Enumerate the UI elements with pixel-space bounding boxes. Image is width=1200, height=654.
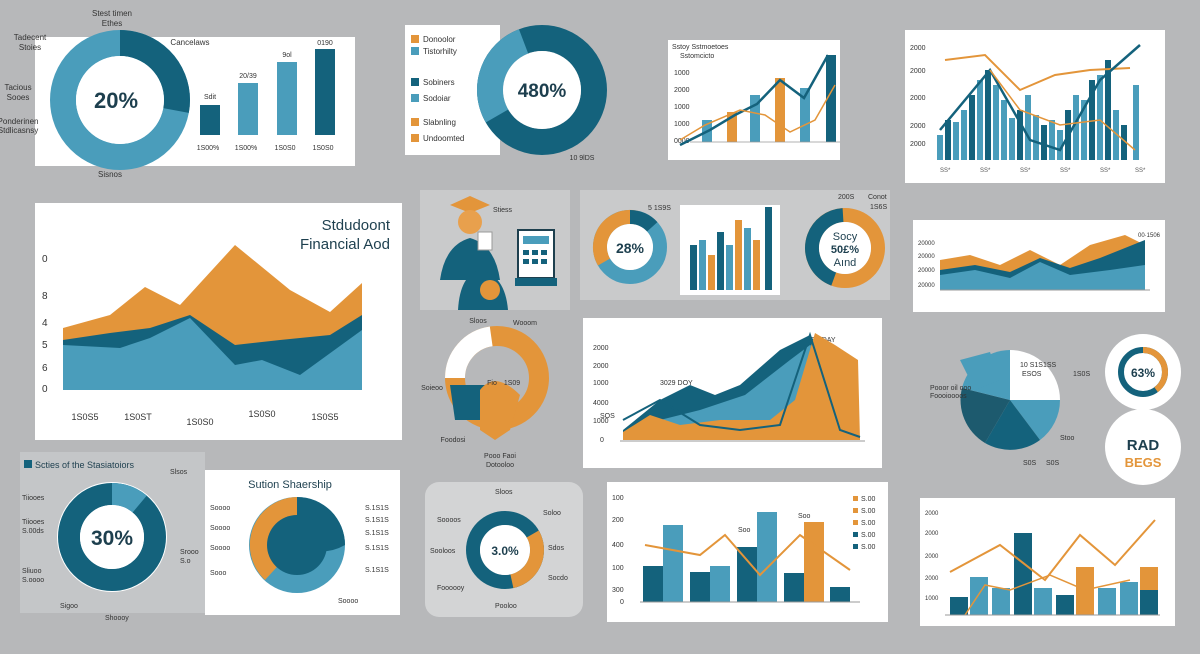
panel: bar + line chart top middle: 1000 [674,121,690,128]
panel: orange donut with figure: Wooom [513,320,537,327]
panel: Student Financial Aid area chart: 1S0S0 [186,417,214,427]
panel: orange donut with figure: Soieoo [421,385,443,392]
panel: 3.0% donut: Sooloos [430,548,456,555]
donut labels: Cancelaws [170,38,210,47]
icon: calculator [515,230,557,286]
panel: 3.0% donut: Soooos [437,517,461,524]
panel: 3.0% donut: Socdo [548,575,568,582]
legend: Slabnling [423,118,456,127]
bar chart: 1S00% [235,145,257,152]
panel: bottom-left 30% donut: Srooo [180,549,199,556]
panel: top-right bar chart with lines: SS* [1020,168,1031,174]
panel: orange donut with figure: Foodosi [441,437,466,444]
panel: bottom bar + line chart: S.00 [861,508,876,515]
panel: person illustration: Stiess [493,207,513,214]
panel: top-right bar chart with lines: SS* [980,168,991,174]
panel: orange donut with figure: 1S09 [504,380,520,387]
panel: Student Financial Aid area chart: 5 [42,340,48,351]
panel: Sution Shaership pie: S.1S1S [365,567,389,574]
panel: bottom-left 30% donut: S.00ds [22,528,44,535]
bar chart: 0190 [317,40,333,47]
panel: bar + line chart top middle: 0000 [674,138,690,145]
panel: bottom-right bar + line chart: 2000 [925,511,939,517]
panel: right area chart: 20000 [918,241,935,247]
panel: bottom-right bar + line chart [920,498,1175,626]
donut Socy 50%: 200S [838,194,855,201]
panel: bottom bar + line chart: S.00 [861,496,876,503]
panel: top-right bar chart with lines: 2000 [910,45,926,52]
panel: center area chart: 2000 [593,363,609,370]
panel: bottom bar + line chart: Soo [738,527,751,534]
panel: bottom bar + line chart: S.00 [861,520,876,527]
panel: pie chart right: Stoo [1060,435,1075,442]
panel: Student Financial Aid area chart: 1S0ST [124,412,152,422]
bar chart [197,40,335,152]
panel: bottom bar + line chart: 200 [612,517,624,524]
legend [411,35,464,143]
panel: Sution Shaership pie: Soooo [210,525,230,532]
panel: top-right bar chart with lines: SS* [940,168,951,174]
donut Socy 50%: 1S6S [870,204,887,211]
bar chart: 9ol [282,52,292,59]
panel: Student Financial Aid area chart: 1S0S5 [71,412,99,422]
panel: orange donut with figure: Sloos [469,318,487,325]
panel: orange donut with figure: Pooo Faoi [484,453,516,460]
panel: Sution Shaership pie: Soooo [338,598,358,605]
panel: bottom-left 30% donut: Sigoo [60,603,78,610]
panel: Sution Shaership pie: S.1S1S [365,545,389,552]
donut 480%: 480% [518,81,566,102]
panel: bar + line chart top middle: Sstomcicto [680,53,714,60]
panel: center area chart: SOS DAY [805,337,836,344]
panel: 3.0% donut: Pooloo [495,603,517,610]
panel: center area chart [583,318,882,468]
panel: Sution Shaership pie: S.1S1S [365,505,389,512]
bar chart [680,205,780,295]
donut 480% [471,19,613,162]
panel: pie chart right: ESOS [1022,371,1042,378]
panel: 3.0% donut: 3.0% [491,544,519,558]
panel: pie chart right: 10 S1S1SS [1020,362,1057,369]
panel: bottom-left 30% donut: Sliuoo [22,568,42,575]
donut labels: Stest timen [92,9,132,18]
panel: top-right bar chart with lines [905,30,1165,183]
legend: Sodoiar [423,94,451,103]
panel: bottom bar + line chart [607,482,888,622]
panel: person illustration [420,190,570,310]
donut labels: Tacious [4,83,32,92]
panel: top-right bar chart with lines: SS* [1060,168,1071,174]
panel: bar + line chart top middle: Sstoy Sstmoetoes [672,44,729,51]
legend: Donoolor [423,35,456,44]
heading: Financial Aod [300,236,390,253]
panel: Sution Shaership pie: Soooo [210,505,230,512]
panel: top-right bar chart with lines: SS* [1100,168,1111,174]
panel: 3.0% donut: Sdos [548,545,564,552]
panel: 63% circle: 63% [1131,366,1155,380]
donut labels [0,9,210,179]
panel: center area chart: 1000 [593,380,609,387]
legend: Sobiners [423,78,455,87]
donut 28%: 28% [616,240,645,256]
bar chart: Sdit [204,94,216,101]
panel: bar + line chart top middle: 1000 [674,104,690,111]
panel: center area chart: 1000 [593,418,609,425]
donut labels: Stoies [19,43,41,52]
panel: Student Financial Aid area chart: 1S0S0 [248,409,276,419]
panel: bottom-left 30% donut: Tiiooes [22,519,45,526]
panel: pie chart right: 1S0S [1073,371,1090,378]
bar chart: 20/39 [239,73,257,80]
panel: center area chart: 2000 [593,345,609,352]
donut Socy 50%: Conot [868,194,887,201]
panel: Student Financial Aid area chart [35,203,402,440]
donut 28% [589,205,671,288]
panel: bottom bar + line chart: 300 [612,587,624,594]
panel: bar + line chart top middle: 2000 [674,87,690,94]
panel: Student Financial Aid area chart: 0 [42,254,48,265]
panel: Sution Shaership pie: Sooo [210,570,226,577]
bar chart: 1S0S0 [274,145,296,152]
panel: RAD BEGS circle: RAD [1127,437,1159,454]
icon: graduate person [440,196,508,310]
panel: top-right bar chart with lines: 2000 [910,141,926,148]
donut Socy 50%: Aınd [834,257,856,269]
panel: Sution Shaership pie: S.1S1S [365,530,389,537]
panel: pie chart right: Foooioooos [930,393,967,400]
donut labels: Ethes [102,19,122,28]
donut 480%: 10 9lDS [570,155,595,162]
legend: Undoomted [423,134,464,143]
panel: top-right bar chart with lines: SS* [1135,168,1146,174]
panel: Student Financial Aid area chart: 6 [42,363,48,374]
panel: right area chart [913,220,1165,312]
panel: top-right bar chart with lines: 2000 [910,68,926,75]
panel: center area chart: 0 [600,437,604,444]
panel: 3.0% donut [425,482,583,617]
panel: bottom bar + line chart: 100 [612,495,624,502]
panel: pie chart right: Pooor oil ooo [930,385,971,392]
panel: Student Financial Aid area chart: 1S0S5 [311,412,339,422]
panel: bottom-right bar + line chart: 2000 [925,531,939,537]
panel: Sution Shaership pie: Sution Shaership [248,479,332,491]
panel: bottom-left 30% donut: 30% [91,527,133,550]
panel: orange donut with figure [421,318,539,469]
panel: Student Financial Aid area chart: 4 [42,318,48,329]
panel: bottom-left 30% donut: Shoooy [105,615,129,622]
panel: right area chart: 00·1506 [1138,233,1161,239]
panel: legend + 480% donut [405,19,613,162]
panel: bottom bar + line chart: S.00 [861,544,876,551]
donut labels: Sisnos [98,170,122,179]
donut Socy 50%: Socy [833,231,858,243]
donut Socy 50% [803,194,887,290]
panel: bar + line chart top middle: 1000 [674,70,690,77]
panel: bar + line chart top middle [668,40,840,160]
heading: Stdudoont [322,217,391,234]
panel: Sution Shaership pie: Soooo [210,545,230,552]
panel: top-left donut and bars [0,9,355,179]
panel: right area chart: 20000 [918,254,935,260]
donut Socy 50%: 50£% [831,244,859,256]
panel: 3.0% donut: Sloos [495,489,513,496]
legend: Tistorhilty [423,47,457,56]
panel: 3.0% donut: Soloo [543,510,561,517]
panel: Sution Shaership pie: S.1S1S [365,517,389,524]
bar chart: 1S00% [197,145,219,152]
panel: orange donut with figure: Dotooloo [486,462,514,469]
panel: Student Financial Aid area chart: 0 [42,384,48,395]
panel: 3.0% donut: Foooooy [437,585,465,592]
panel: bottom-left 30% donut: Scties of the Stasiatoiors [35,460,135,470]
panel: bottom bar + line chart: 0 [620,599,624,606]
donut 20%: 20% [94,88,138,113]
panel: right area chart: 20000 [918,268,935,274]
panel: bottom bar + line chart: 100 [612,565,624,572]
panel: bottom-right bar + line chart: 1000 [925,596,939,602]
panel: bottom-left 30% donut: S.oooo [22,577,44,584]
panel: bottom bar + line chart: Soo [798,513,811,520]
panel: RAD BEGS circle: BEGS [1125,455,1162,470]
panel: bottom-left 30% donut: Slsos [170,469,188,476]
donut labels: Tadecent [14,33,47,42]
panel: RAD BEGS circle [1105,409,1181,485]
panel: orange donut with figure: Fio [487,380,497,387]
panel: center area chart: 4000 [593,400,609,407]
panel: bottom bar + line chart: 400 [612,542,624,549]
panel: center area chart: 3029 DOY [660,380,693,387]
panel: top-right bar chart with lines: 2000 [910,95,926,102]
donut labels: Sooes [7,93,29,102]
panel: Sution Shaership pie [205,470,400,615]
donut 20% [63,43,177,157]
donut 28%: 5 1S9S [648,205,671,212]
panel: Student Financial Aid area chart: 8 [42,291,48,302]
panel: bottom-left 30% donut [20,452,205,622]
panel: bottom-right bar + line chart: 2000 [925,576,939,582]
bar chart: 1S0S0 [312,145,334,152]
panel: bottom bar + line chart: S.00 [861,532,876,539]
panel: top-right bar chart with lines: 2000 [910,123,926,130]
panel: bottom-left 30% donut: Tiiooes [22,495,45,502]
panel: pie chart right: S0S [1046,460,1060,467]
panel: middle donuts and bars [580,190,890,300]
panel: pie chart right: S0S [1023,460,1037,467]
panel: bottom-left 30% donut: S.o [180,558,191,565]
heading [300,217,391,253]
panel: right area chart: 20000 [918,283,935,289]
panel: pie chart right [930,350,1090,467]
panel: 63% circle [1105,334,1181,410]
panel: bottom-right bar + line chart: 2000 [925,554,939,560]
panel: center area chart: SOS [600,413,615,420]
